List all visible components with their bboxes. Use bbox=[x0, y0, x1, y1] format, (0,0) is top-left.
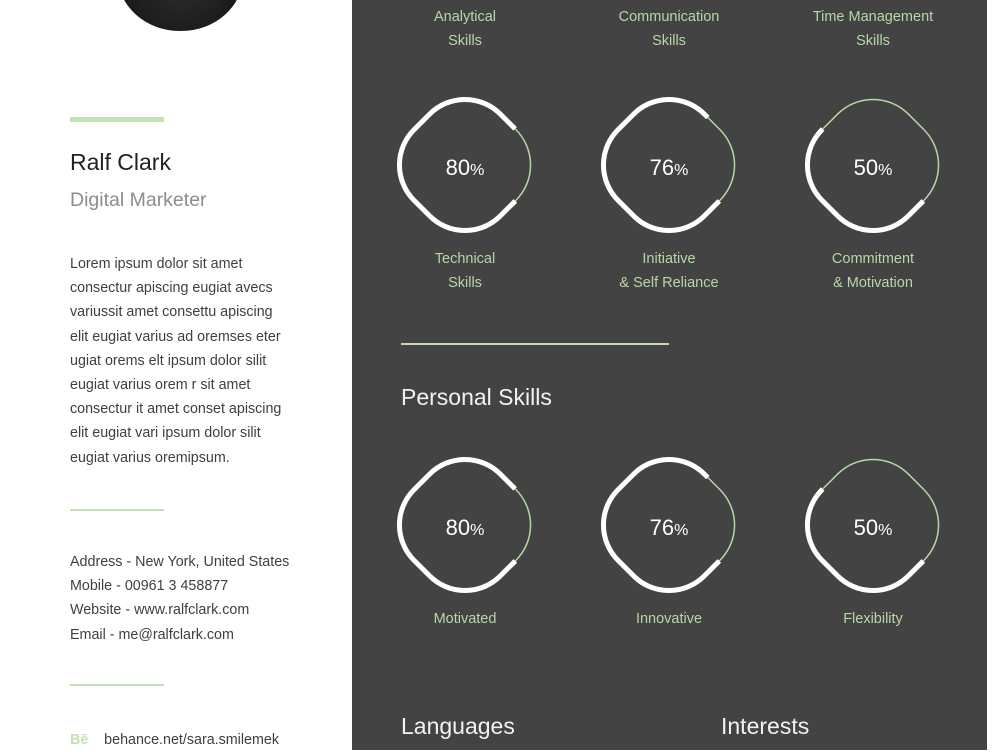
top skill labels bbox=[434, 9, 496, 49]
row1 labels bbox=[435, 251, 495, 291]
contact info: Address - New York, United States bbox=[70, 554, 289, 570]
panel: skills: Flexibility bbox=[843, 611, 903, 627]
accent bar bbox=[70, 117, 164, 122]
bio text: Lorem ipsum dolor sit amet bbox=[70, 256, 242, 272]
row1 labels: Skills bbox=[448, 275, 482, 291]
panel: skills: Time Management bbox=[813, 9, 933, 25]
contact info: Website - www.ralfclark.com bbox=[70, 602, 249, 618]
bio text: elit eugiat varius ad oremses eter bbox=[70, 329, 281, 345]
photo bottom bbox=[118, 0, 243, 31]
gauge 80 bbox=[379, 79, 551, 251]
gauge p76: 76% bbox=[650, 515, 688, 540]
gauge 50: 50% bbox=[854, 155, 892, 180]
panel: skills: Initiative bbox=[642, 251, 696, 267]
bio text: ugiat orems elt ipsum dolor silit bbox=[70, 353, 266, 369]
panel: skills: & Self Reliance bbox=[619, 275, 719, 291]
heading: personal skills: Personal Skills bbox=[401, 384, 552, 410]
panel: skills: Skills bbox=[652, 33, 686, 49]
gauge p50 bbox=[787, 439, 959, 611]
heading: languages: Languages bbox=[401, 713, 515, 739]
top skill labels: Analytical bbox=[434, 9, 496, 25]
panel: skills: Commitment bbox=[832, 251, 914, 267]
contact info bbox=[70, 554, 289, 643]
panel: skills: Innovative bbox=[636, 611, 702, 627]
bio text: variussit amet consettu apiscing bbox=[70, 304, 273, 320]
contact info: Email - me@ralfclark.com bbox=[70, 627, 234, 643]
gauge p80: 80% bbox=[446, 515, 484, 540]
panel: skills: & Motivation bbox=[833, 275, 913, 291]
gauge 80: 80% bbox=[446, 155, 484, 180]
gauges bbox=[396, 97, 940, 593]
bio text: elit eugiat vari ipsum dolor silit bbox=[70, 425, 261, 441]
gauge 76: 76% bbox=[650, 155, 688, 180]
row2 labels: Motivated bbox=[434, 611, 496, 627]
heading: interests: Interests bbox=[721, 713, 809, 739]
behance link: Bē behance.net/sara.smilemek bbox=[70, 732, 279, 748]
panel: skills: Skills bbox=[856, 33, 890, 49]
name: Ralf Clark bbox=[70, 149, 171, 175]
gauge 50 bbox=[787, 79, 959, 251]
bio text: consectur apiscing eugiat avecs bbox=[70, 280, 273, 296]
contact info: Mobile - 00961 3 458877 bbox=[70, 578, 228, 594]
gauge 76 bbox=[583, 79, 755, 251]
gauge p76 bbox=[583, 439, 755, 611]
top skill labels: Skills bbox=[448, 33, 482, 49]
job title: Digital Marketer bbox=[70, 189, 207, 211]
panel: skills bbox=[352, 0, 987, 750]
bio text bbox=[70, 256, 281, 466]
row1 labels: Technical bbox=[435, 251, 495, 267]
gauge p50: 50% bbox=[854, 515, 892, 540]
gauge p80 bbox=[379, 439, 551, 611]
panel: skills: Communication bbox=[619, 9, 719, 25]
bio text: eugiat varius orem r sit amet bbox=[70, 377, 250, 393]
bio text: eugiat varius oremipsum. bbox=[70, 450, 230, 466]
bio text: consectur it amet conset apiscing bbox=[70, 401, 281, 417]
